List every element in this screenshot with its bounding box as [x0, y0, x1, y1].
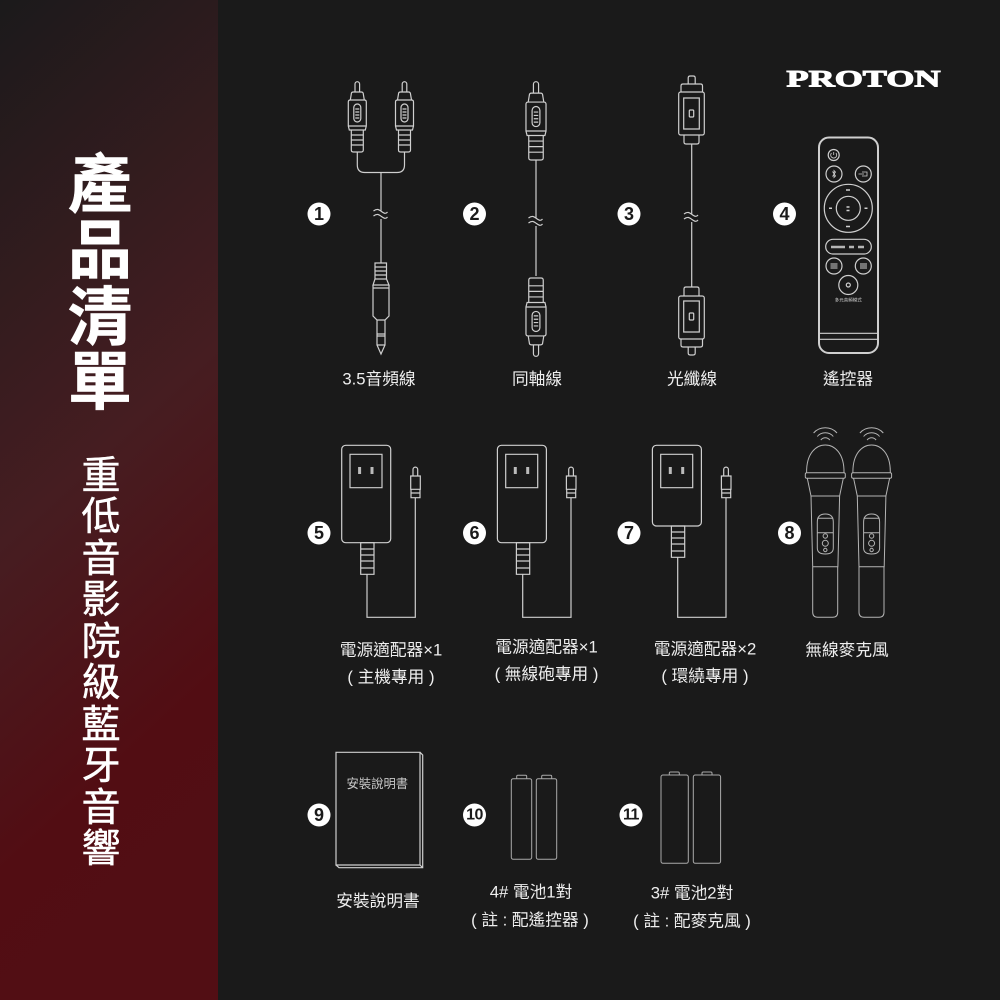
badge 5	[308, 522, 330, 544]
label: adapter 7	[654, 640, 756, 686]
title: 清	[68, 282, 132, 354]
label: manual: 安裝說明書	[336, 892, 420, 910]
badge 2	[463, 202, 486, 226]
subtitle: 藍	[81, 704, 121, 747]
label: adapter 7: ( 環繞專用 )	[661, 666, 749, 686]
badge 5: 5	[314, 523, 324, 543]
label: AA batteries	[633, 884, 751, 930]
label: remote control: 遙控器	[823, 370, 873, 388]
badge 8: 8	[784, 523, 795, 543]
badge 10	[463, 804, 486, 826]
icon: wireless microphones	[805, 428, 892, 617]
icon: power adapter 7	[652, 445, 731, 617]
badge 7	[618, 522, 640, 544]
label: AAA batteries: 4# 電池1對	[490, 882, 572, 902]
panel: left title band	[0, 0, 218, 1000]
badge 3: 3	[624, 204, 634, 224]
badge 7: 7	[624, 523, 634, 543]
subtitle: 音	[81, 787, 121, 830]
icon: manual booklet: 安裝說明書	[347, 776, 408, 791]
label: adapter 7: 電源適配器×2	[654, 640, 756, 658]
badge 1	[308, 202, 330, 226]
icon: manual booklet	[336, 752, 423, 868]
label: adapter 6: ( 無線砲專用 )	[495, 664, 598, 684]
badge 11	[620, 804, 642, 826]
subtitle: 音	[81, 538, 121, 581]
icon: remote control: 多元音頻模式	[835, 296, 862, 304]
badge 2: 2	[469, 204, 480, 224]
title: 產	[68, 149, 132, 221]
badge 9: 9	[314, 805, 324, 825]
badge 4: 4	[779, 204, 790, 224]
icon: AAA batteries	[511, 775, 557, 859]
subtitle: 院	[81, 621, 121, 664]
icon: power adapter 5	[342, 445, 420, 617]
subtitle: 低	[81, 496, 121, 539]
subtitle: 響	[81, 828, 121, 871]
icon: remote control	[819, 138, 878, 353]
label: adapter 5: ( 主機專用 )	[347, 668, 435, 686]
label: adapter 5: 電源適配器×1	[340, 640, 442, 660]
badge 6	[463, 522, 486, 544]
icon: 3.5mm audio cable	[348, 82, 414, 354]
icon: AA batteries	[661, 772, 721, 863]
label: adapter 6	[495, 638, 598, 684]
badge 3	[618, 202, 640, 226]
label: AA batteries: 3# 電池2對	[651, 884, 733, 902]
badge 10: 10	[466, 806, 484, 824]
title: 品	[68, 215, 132, 287]
label: coaxial cable: 同軸線	[512, 370, 562, 388]
icon: coaxial cable	[526, 82, 546, 356]
label: 3.5 audio cable: 3.5音頻線	[342, 370, 416, 388]
badge 11: 11	[623, 806, 640, 824]
label: AAA batteries	[471, 882, 589, 930]
badge 9	[308, 804, 330, 826]
badge 6: 6	[469, 523, 480, 543]
label: adapter 6: 電源適配器×1	[495, 638, 598, 656]
label: adapter 5	[340, 640, 442, 686]
subtitle: 級	[81, 662, 121, 705]
label: microphones: 無線麥克風	[805, 640, 889, 660]
subtitle: 重	[81, 455, 121, 498]
label: AA batteries: ( 註 : 配麥克風 )	[633, 912, 751, 930]
icon: power adapter 6	[497, 445, 576, 617]
badge 8	[778, 522, 801, 544]
badge 4	[773, 202, 796, 226]
label: AAA batteries: ( 註 : 配遙控器 )	[471, 910, 589, 930]
badge 1: 1	[314, 204, 324, 224]
icon: optical cable	[679, 76, 704, 355]
subtitle: 影	[81, 579, 121, 622]
number badges	[308, 202, 801, 826]
title: 單	[68, 346, 132, 418]
label: optical cable: 光纖線	[667, 370, 717, 388]
logo: PROTON: PROTON	[786, 66, 941, 92]
subtitle: 牙	[81, 745, 121, 788]
